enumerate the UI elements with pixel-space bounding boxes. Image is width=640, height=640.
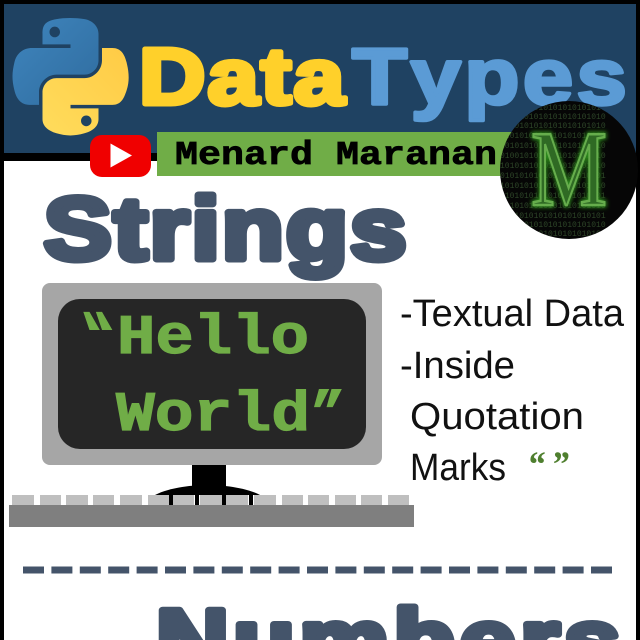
icon: youtube [90,135,151,177]
text block: string facts: Marks [410,447,506,489]
text block: string facts: Quotation [410,396,584,438]
badge: M logo: 1010101010101010101010 [500,221,606,230]
monitor stand [155,464,260,495]
text block: string facts: -Textual Data [400,293,625,335]
text block: string facts: “ ” [527,444,569,484]
header banner [4,4,636,153]
keyboard keys [12,495,409,505]
badge: M logo: 0101010101010101010101 [500,230,606,239]
text block: string facts: -Inside [400,345,515,387]
stand legs [169,494,253,505]
screen text: World [116,383,310,447]
badge: M logo: 0101010101010101010101 [500,132,606,141]
text block: string facts [400,293,625,489]
screen text [67,306,345,447]
badge: M logo: 1010101010101010101010 [500,122,606,131]
illustration: computer [9,283,414,527]
name banner: Menard Maranan [175,137,497,174]
title: Data Types: Data [139,33,347,122]
keyboard base [9,505,414,527]
title: Data Types: Types [352,33,630,122]
heading: Strings: Strings [44,180,409,278]
badge: M logo: 0101010101010101010101 [500,172,606,181]
monitor [42,283,382,465]
badge: M logo: 0100101010101010101010 [500,113,606,122]
badge: M logo: M [531,110,607,229]
badge: M logo: M [531,110,607,229]
screen text: ” [311,383,345,447]
dashed divider [23,566,616,574]
badge: M logo: 1010101010101010101010 [500,182,606,191]
title: Data Types [139,33,630,122]
icon: python logo [13,18,129,135]
screen text: Hello [117,306,309,370]
badge: M logo: 0100101010101010101010 [500,152,606,161]
badge: M logo [500,101,638,239]
badge: M logo: 1010101010101010101010 [500,202,606,211]
screen [58,299,366,449]
badge: M logo: 1010101010101010101010 [500,162,606,171]
screen text: “ [67,307,154,370]
badge: M logo: 0101010101010101010101 [500,192,606,201]
badge: M logo: 0101010101010101010101 [500,212,606,221]
name banner [157,132,517,176]
badge: M logo: 1010101010101010101010 [500,104,606,113]
badge: M logo: 1010101010101010101010 [500,142,606,151]
